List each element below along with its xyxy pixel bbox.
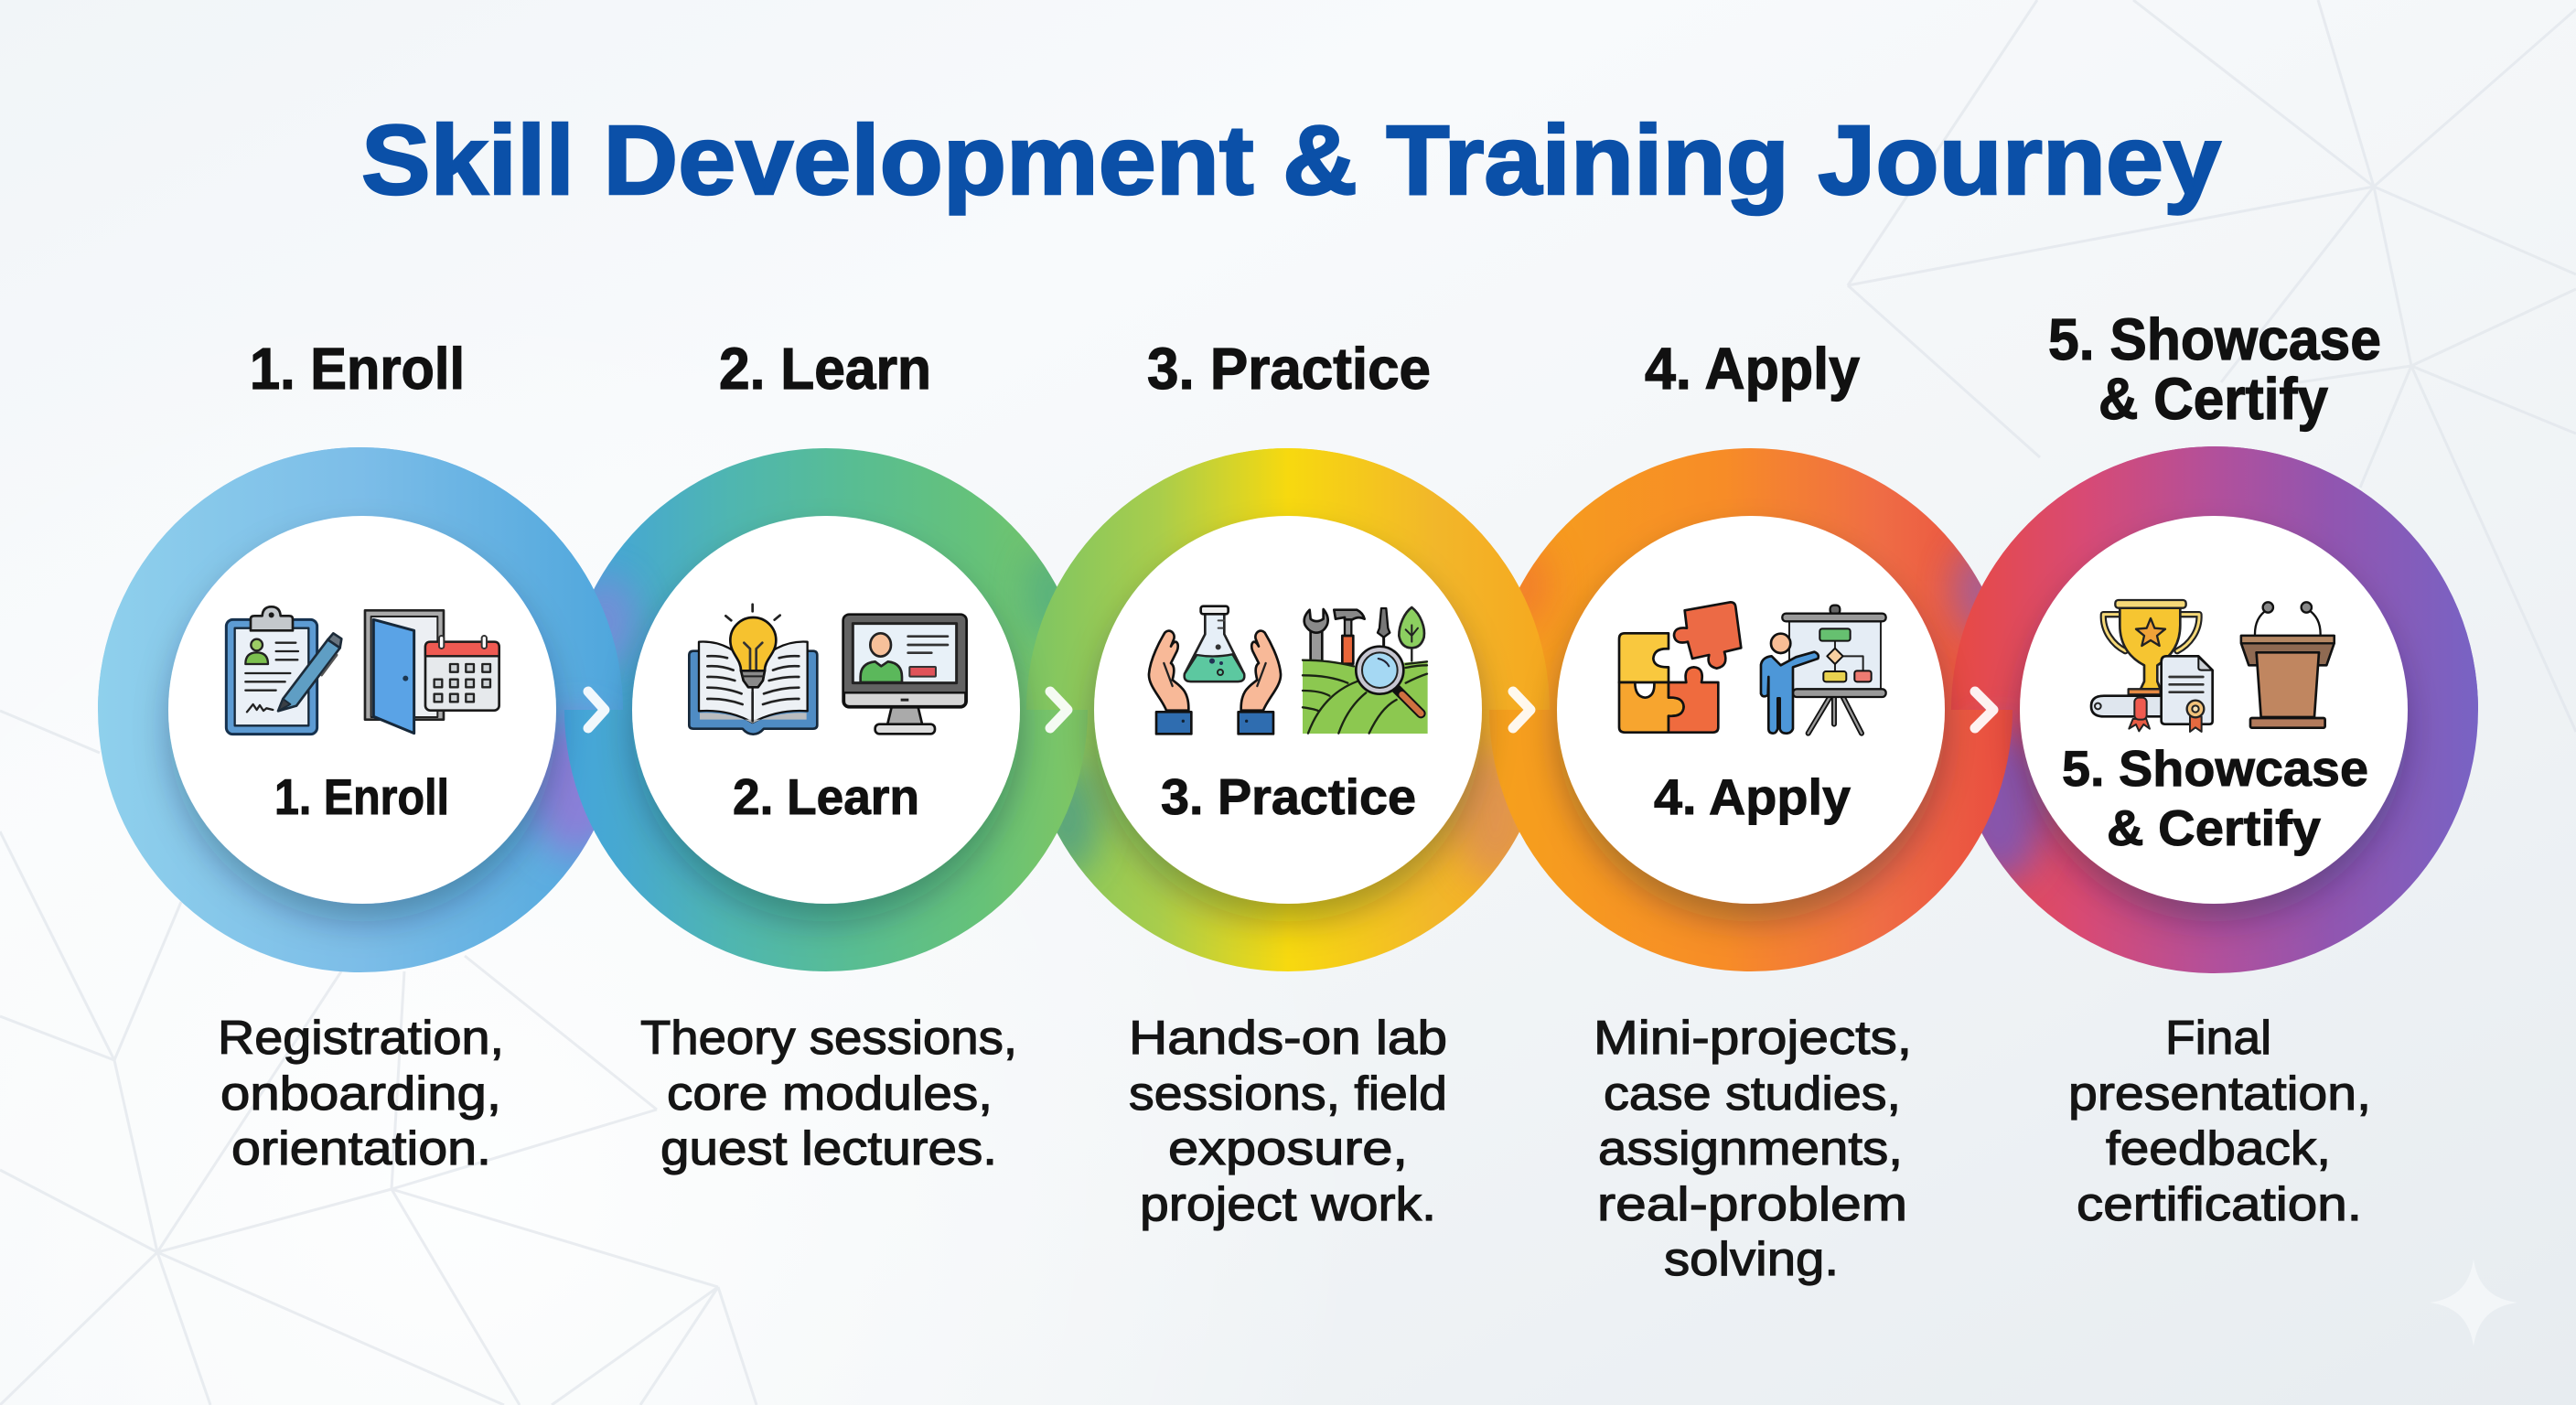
label: step 5: [2062, 740, 2368, 856]
text block: step 2 description: guest lectures.: [660, 1122, 997, 1175]
icon: clipboard with pen: [226, 606, 341, 735]
text block: step 5 description: feedback,: [2106, 1122, 2331, 1175]
label: step 3: 3. Practice: [1161, 768, 1416, 825]
text block: step 3 description: Hands-on lab: [1129, 1012, 1447, 1065]
panel: step 1 circle: [168, 516, 556, 904]
arrow: step 3 to 4: [1513, 692, 1530, 728]
text block: step 1 description: [218, 1012, 504, 1175]
icon: tools, field and magnifier: [1303, 607, 1428, 734]
icon: online class monitor: [843, 615, 967, 734]
text block: step 3 description: exposure,: [1168, 1122, 1408, 1175]
text block: step 2 description: [640, 1012, 1017, 1175]
ring 1: [98, 447, 623, 972]
panel: step 4 circle: [1557, 516, 1945, 904]
heading: step 2: 2. Learn: [719, 336, 931, 402]
ring 2: [564, 448, 1088, 971]
arrow: step 2 to 3: [1050, 692, 1068, 728]
ring 4: [1489, 448, 2012, 971]
icon: puzzle pieces: [1619, 602, 1741, 733]
text block: step 4 description: assignments,: [1598, 1122, 1903, 1175]
title: Skill Development & Training Journey: [361, 104, 2221, 215]
text block: step 3 description: [1129, 1012, 1447, 1231]
icon: hands holding lab flask: [1149, 606, 1281, 734]
text block: step 3 description: project work.: [1140, 1178, 1436, 1231]
panel: step 5 circle: [2020, 516, 2408, 904]
heading: step 1: 1. Enroll: [250, 336, 465, 402]
text block: step 4 description: [1594, 1012, 1912, 1286]
text block: step 1 description: orientation.: [231, 1122, 491, 1175]
icon: book and light bulb: [689, 605, 817, 735]
text block: step 5 description: presentation,: [2068, 1067, 2371, 1121]
ring 3: [1026, 448, 1550, 971]
panel: step 2 circle: [632, 516, 1020, 904]
heading: step 5: [2048, 306, 2381, 432]
text block: step 4 description: case studies,: [1604, 1067, 1901, 1121]
icon: door and calendar: [365, 610, 499, 734]
text block: step 5 description: certification.: [2077, 1178, 2362, 1231]
arrow: step 4 to 5: [1975, 692, 1993, 728]
text block: step 2 description: Theory sessions,: [640, 1012, 1017, 1065]
panel: step 3 circle: [1094, 516, 1482, 904]
heading: step 5: 5. Showcase: [2048, 306, 2381, 372]
heading: step 4: 4. Apply: [1645, 336, 1860, 402]
label: step 1: 1. Enroll: [274, 768, 449, 825]
text block: step 3 description: sessions, field: [1129, 1067, 1447, 1121]
arrow: step 1 to 2: [588, 692, 605, 728]
rings: interlocked gradient bands: [98, 446, 2478, 973]
heading: step 3: 3. Practice: [1147, 336, 1431, 402]
heading: step 5: & Certify: [2098, 366, 2328, 432]
text block: step 2 description: core modules,: [667, 1067, 993, 1121]
text block: step 4 description: real-problem: [1597, 1178, 1907, 1231]
text block: step 5 description: [2068, 1012, 2371, 1231]
label: step 4: 4. Apply: [1654, 768, 1851, 825]
upper-half crossings of odd rings: [98, 446, 2478, 900]
ring 5: [1951, 446, 2478, 973]
icon: trophy, scroll and certificate: [2091, 600, 2213, 732]
text block: step 1 description: onboarding,: [220, 1067, 501, 1121]
text block: step 1 description: Registration,: [218, 1012, 504, 1065]
label: step 5: 5. Showcase: [2062, 740, 2368, 797]
label: step 2: 2. Learn: [733, 768, 919, 825]
icon: presenter with flow chart: [1761, 606, 1886, 734]
text block: step 4 description: Mini-projects,: [1594, 1012, 1912, 1065]
text block: step 5 description: Final: [2165, 1012, 2271, 1065]
label: step 5: & Certify: [2107, 799, 2321, 856]
icon: podium with microphones: [2241, 602, 2334, 728]
icon: sparkle watermark: [2430, 1259, 2517, 1346]
text block: step 4 description: solving.: [1664, 1233, 1839, 1286]
